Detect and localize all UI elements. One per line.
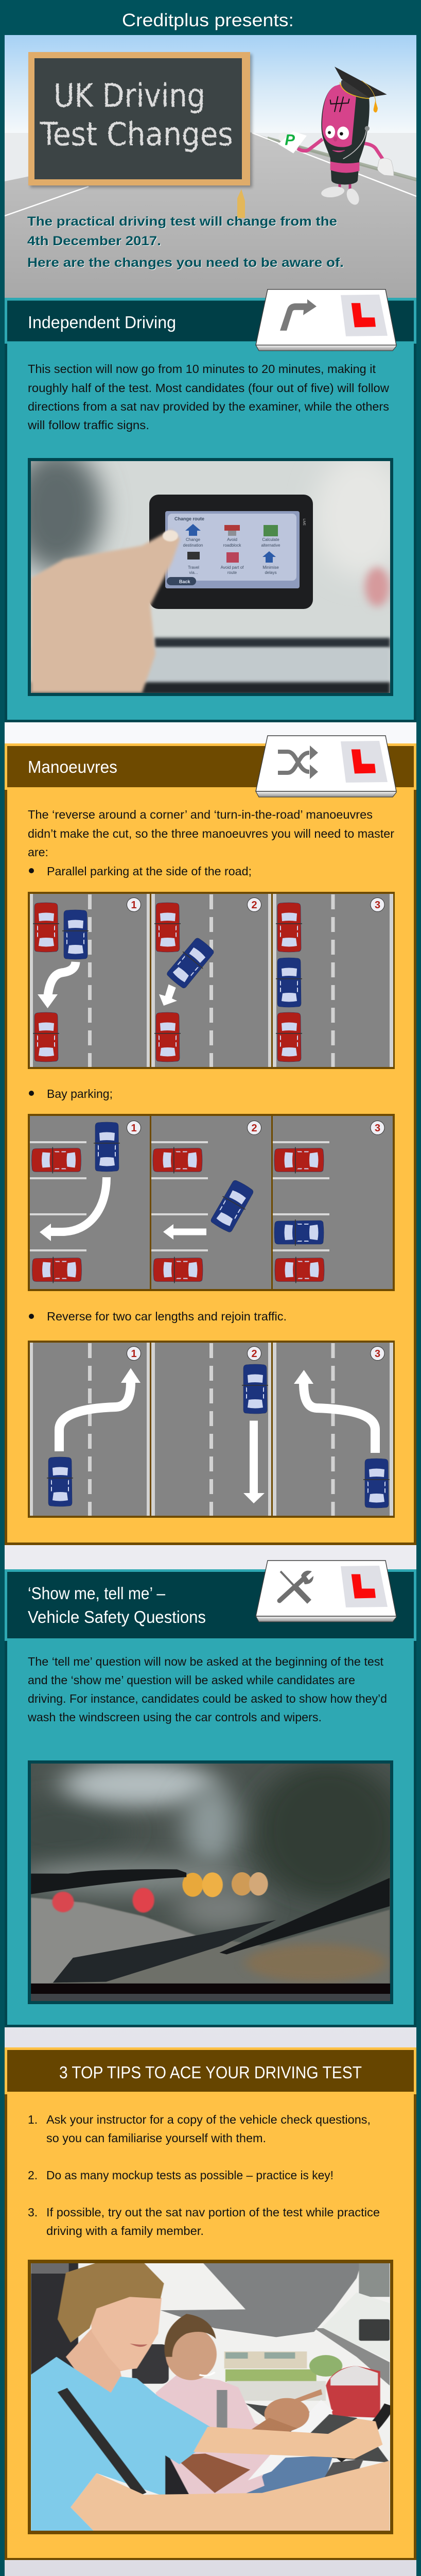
intro text: Here are the changes you need to be aware of. <box>27 256 344 270</box>
panel: independent driving <box>5 290 416 722</box>
diagram: parallel parking: 3 <box>375 900 380 911</box>
diagram: bay parking: 3 <box>375 1123 380 1134</box>
heading: ‘Show me, tell me’ – <box>28 1584 166 1603</box>
panel: manoeuvres <box>5 736 416 1545</box>
bullet: parallel parking: Parallel parking at the side of the road; <box>47 865 252 878</box>
title: Creditplus presents: <box>122 10 294 30</box>
diagram: reverse and rejoin <box>29 1342 394 1517</box>
photo: sat nav on windscreen: delays <box>265 570 277 575</box>
body text: This section will now go from 10 minutes to 20 minutes, making it <box>28 362 376 376</box>
photo: sat nav on windscreen: Change route <box>174 516 204 521</box>
sign with shuffle icon <box>256 736 396 797</box>
tips list: Ask your instructor for a copy of the vehicle check questions, <box>46 2113 371 2126</box>
photo: wipers in the rain <box>0 1760 404 2004</box>
heading: Manoeuvres <box>28 757 117 776</box>
body text: The ‘tell me’ question will now be asked at the beginning of the test <box>28 1655 384 1668</box>
photo: learner and instructor in car <box>28 2260 393 2534</box>
photo: sat nav on windscreen: via... <box>189 570 198 575</box>
tips list: 1. <box>28 2113 38 2126</box>
body text: and the ‘show me’ question will be asked while candidates are <box>28 1673 355 1687</box>
body text: directions from a sat nav provided by the examiner, while the others <box>28 400 389 413</box>
panel: show me tell me <box>0 1561 416 2027</box>
diagram: reverse and rejoin: 2 <box>251 1348 257 1360</box>
tips list: so you can familiarise yourself with them. <box>46 2131 266 2145</box>
heading <box>28 1584 206 1626</box>
chalkboard <box>28 52 252 188</box>
chalkboard: Test Changes <box>40 115 233 153</box>
intro text: didn’t make the cut, so the three manoeuvres you will need to master <box>28 827 394 840</box>
light panel background <box>5 722 416 2576</box>
photo: sat nav on windscreen: Back <box>179 579 191 584</box>
tips list: 3. <box>28 2206 38 2219</box>
photo: sat nav on windscreen <box>28 458 393 696</box>
intro text: are: <box>28 845 48 859</box>
photo: sat nav on windscreen: Change <box>186 537 201 542</box>
bullet: reverse: Reverse for two car lengths and rejoin traffic. <box>47 1310 287 1323</box>
heading: 3 TOP TIPS TO ACE YOUR DRIVING TEST <box>59 2063 362 2082</box>
diagram: parallel parking: 1 <box>131 900 137 911</box>
body text <box>27 1655 387 1724</box>
diagram: bay parking <box>29 1115 394 1290</box>
bullet: bay parking: Bay parking; <box>47 1087 113 1100</box>
photo: sat nav on windscreen: Travel <box>188 565 199 570</box>
diagram: bay parking: 2 <box>251 1123 257 1134</box>
photo: sat nav on windscreen: route <box>227 570 237 575</box>
photo: sat nav on windscreen: destination <box>183 543 203 548</box>
photo: sat nav on windscreen: Avoid part of <box>221 565 244 570</box>
sign with tools icon <box>256 1561 396 1622</box>
photo: sat nav on windscreen: Calculate <box>262 537 279 542</box>
body text: wash the windscreen using the car controls and wipers. <box>27 1710 322 1724</box>
intro text: The ‘reverse around a corner’ and ‘turn-in-the-road’ manoeuvres <box>28 808 373 821</box>
diagram: bay parking: 1 <box>131 1123 137 1134</box>
tips list: If possible, try out the sat nav portion of the test while practice <box>46 2206 380 2219</box>
photo: sat nav on windscreen: alternative <box>261 543 280 548</box>
diagram: parallel parking: 2 <box>251 900 257 911</box>
photo: sat nav on windscreen: roadblock <box>223 543 241 548</box>
diagram: reverse and rejoin: 1 <box>131 1348 137 1360</box>
diagram: reverse and rejoin: 3 <box>375 1348 380 1360</box>
intro text: 4th December 2017. <box>27 234 161 248</box>
hero panel <box>5 35 416 298</box>
body text: driving. For instance, candidates could be asked to show how they’d <box>28 1692 387 1705</box>
mascot with graduation cap and P plate <box>278 66 394 207</box>
intro text: The practical driving test will change from the <box>27 214 337 229</box>
chalkboard: UK Driving <box>54 77 205 114</box>
tips list: 2. <box>28 2168 38 2182</box>
photo: sat nav on windscreen: Minimise <box>262 565 279 570</box>
heading: Vehicle Safety Questions <box>28 1607 206 1626</box>
mascot with graduation cap and P plate: P <box>285 132 295 149</box>
heading: Independent Driving <box>28 313 176 332</box>
diagram: parallel parking <box>29 893 394 1068</box>
photo: sat nav on windscreen: Avoid <box>227 537 237 542</box>
body text <box>27 362 389 432</box>
body text: will follow traffic signs. <box>27 418 149 432</box>
tips list: Do as many mockup tests as possible – practice is key! <box>46 2168 334 2182</box>
intro text <box>28 808 394 859</box>
intro text <box>27 214 344 270</box>
tips list: driving with a family member. <box>46 2224 204 2238</box>
panel: top tips <box>5 2047 416 2560</box>
body text: roughly half of the test. Most candidates (four out of five) will follow <box>28 381 389 395</box>
sign with arrow icon <box>256 290 396 351</box>
photo: sat nav on windscreen: LIVE <box>302 519 305 526</box>
tips list <box>28 2113 380 2238</box>
